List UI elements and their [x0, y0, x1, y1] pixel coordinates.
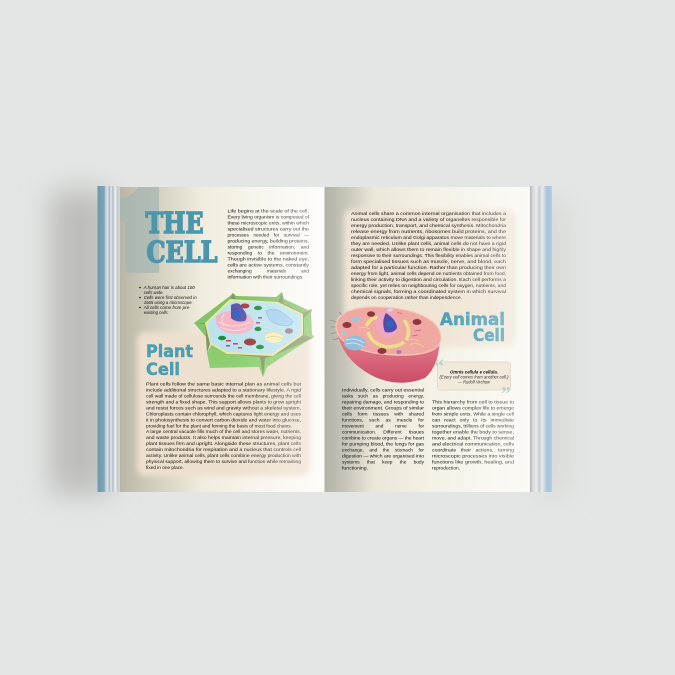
animal text: chemical signals, forming a coordinated system in which survival [351, 289, 506, 295]
plant text: and resist forces such as wind and gravity without a skeletal system. [146, 405, 301, 411]
left page edges [98, 186, 120, 492]
intro text: Every living organism is composed of [228, 215, 310, 221]
right page [324, 187, 530, 492]
intro text: these microscopic units, within which [228, 221, 309, 227]
animal text: endoplasmic reticulum and Golgi apparatus move materials to where [351, 235, 506, 241]
quote marks: ” [501, 383, 511, 405]
fact bullets: A human hair is about 100 [143, 285, 195, 290]
column text: hierarchy: surroundings, trillions of cells working [432, 423, 514, 429]
column text: hierarchy: together enable the body to sense, [432, 429, 514, 435]
column text: hierarchy: move, and adapt. Through chemical [432, 435, 514, 441]
animal text: specific role, yet relies on neighbouring cells for oxygen, nutrients, and [351, 283, 506, 289]
fact bullets: cells wide. [144, 290, 164, 295]
book shadow [50, 190, 565, 495]
animal text: depends on cooperation rather than independence. [351, 295, 462, 301]
animal text: responsive to their surroundings. This flexibility enables animal cells to [351, 253, 506, 259]
column text: individually: cells form tissues with shared [342, 412, 424, 418]
quote callout: — Rudolf Virchow [457, 380, 491, 384]
column text: hierarchy: reproduction. [432, 465, 460, 471]
plant text: strength and a fixed shape. This support allows plants to grow upright [146, 399, 302, 405]
quote marks [434, 356, 511, 405]
plant text: physical support, allowing them to survive and function while remaining [146, 459, 301, 465]
column text: individually: tasks such as producing energy, [342, 394, 424, 400]
fact bullets [139, 285, 197, 315]
column text: individually: for pumping blood, the lungs for gas [342, 442, 425, 448]
plant text: it in photosynthesis to convert carbon dioxide and water into glucose, [146, 417, 301, 423]
column text: hierarchy: from simple units. While a single cell [432, 411, 514, 417]
intro text: information with their surroundings. [228, 275, 304, 281]
column text: individually: repairing damage, and responding to [342, 400, 424, 406]
intro text: responding to the environment. [228, 251, 309, 257]
heading: plant cell: Plant [146, 342, 193, 361]
fact bullets: 1665 using a microscope. [144, 300, 193, 305]
column text: individually: systems that keep the body [342, 460, 425, 466]
column text: individually: Individually, cells carry out essential [342, 388, 424, 394]
plant text: cell wall made of cellulose surrounds the cell membrane, giving the cell [146, 394, 301, 400]
animal text: they are needed. Unlike plant cells, animal cells do not have a rigid [351, 241, 506, 247]
fact bullets: All cells come from pre- [143, 305, 191, 310]
intro text: exchanging materials and [228, 269, 309, 275]
quote marks: “ [434, 356, 444, 378]
fact bullets: existing cells. [144, 310, 169, 315]
quote callout: (Every cell comes from another cell.) [440, 374, 509, 380]
intro text: specialised structures carry out the [228, 227, 309, 233]
intro text: storing genetic information, and [228, 245, 309, 251]
column text: individually: functioning. [342, 466, 368, 472]
heading: plant cell: Cell [146, 360, 180, 379]
panel: plant cell background [137, 332, 310, 476]
quote callout [434, 356, 511, 405]
heading: plant cell [146, 342, 193, 379]
plant text: Plant cells follow the same basic internal plan as animal cells but [146, 382, 302, 388]
column text: hierarchy: and electrical communication, cells [432, 441, 515, 447]
column text: hierarchy: organ allows complex life to emerge [432, 405, 514, 411]
fact bullets: Cells were first observed in [144, 295, 197, 300]
intro text: Life begins at the scale of the cell. [228, 209, 309, 215]
column text: individually: communication. Different tissues [342, 430, 425, 436]
animal text [351, 211, 507, 301]
heading: animal cell [440, 310, 505, 345]
icon: plant cell diagram [194, 292, 314, 377]
intro text: producing energy, building proteins, [228, 239, 309, 245]
heading: animal cell: Cell [473, 326, 505, 345]
plant text: contain mitochondria for respiration and a nucleus that controls cell [146, 447, 301, 453]
right page edges [530, 186, 552, 492]
plant text: fixed in one place. [146, 465, 184, 471]
animal text: form specialised tissues such as muscle, nerve, and blood, each [351, 259, 506, 265]
column text: individually: their environment. Groups of similar [342, 406, 424, 412]
animal text: energy from light, animal cells depend on nutrients obtained from food, [351, 271, 506, 277]
animal text: Animal cells share a common internal organisation that includes a [351, 211, 506, 217]
intro text: processes needed for survival — [228, 233, 309, 239]
plant text [146, 382, 302, 471]
icon: animal cell diagram [330, 307, 441, 383]
animal text: outer wall, which allows them to remain flexible in shape and highly [351, 247, 507, 253]
column text: hierarchy: functions like growth, healing, and [432, 459, 514, 465]
plant text: A large central vacuole fills much of the cell and stores water, nutrients, [146, 429, 301, 435]
column text: individually [342, 388, 425, 472]
column text: hierarchy: This hierarchy from cell to tissue to [432, 399, 514, 405]
page glare overlays [120, 187, 530, 492]
plant text: Chloroplasts contain chlorophyll, which captures light energy and uses [146, 411, 302, 417]
title: THE [146, 206, 204, 240]
plant text: include additional structures adapted to a stationary lifestyle. A rigid [146, 388, 301, 394]
column text: hierarchy: can react only to its immediate [432, 417, 514, 423]
panel: animal cell background [344, 209, 516, 347]
column text: individually: combine to create organs — the heart [342, 436, 425, 442]
column text: individually: digestion — which are organised into [342, 454, 424, 460]
plant text: and waste products. It also helps maintain internal pressure, keeping [146, 435, 301, 441]
heading: animal cell: Animal [440, 310, 505, 329]
title [146, 206, 218, 269]
animal text: adapted for a particular function. Rather than producing their own [351, 265, 506, 271]
column text: individually: movement and nerve for [342, 424, 424, 430]
animal text: linking their activity to digestion and circulation. Each cell performs a [351, 277, 506, 283]
column text: hierarchy: coordinate their actions, turning [432, 447, 514, 453]
intro text: cells are active systems, constantly [228, 263, 310, 269]
animal text: energy production, transport, and chemical synthesis. Mitochondria [351, 223, 506, 229]
animal text: release energy from nutrients, ribosomes build proteins, and the [351, 229, 506, 235]
intro text [228, 209, 310, 281]
column text: individually: functions, such as muscle for [342, 418, 424, 424]
left page [120, 187, 324, 492]
column text: hierarchy [432, 399, 515, 471]
title: CELL [146, 235, 218, 269]
column text: individually: exchange, and the stomach for [342, 448, 424, 454]
quote callout: Omnis cellula e cellula. [450, 370, 498, 374]
animal text: nucleus containing DNA and a variety of organelles responsible for [351, 217, 506, 223]
plant text: plant tissues firm and upright. Alongside these structures, plant cells [146, 441, 302, 447]
plant text: providing fuel for the plant and forming the basis of most food chains. [146, 423, 292, 429]
book [98, 186, 552, 492]
intro text: Though invisible to the naked eye, [228, 257, 309, 263]
column text: hierarchy: microscopic processes into visible [432, 453, 514, 459]
big number 1 [120, 187, 159, 273]
plant text: activity. Unlike animal cells, plant cells combine energy production with [146, 453, 301, 459]
